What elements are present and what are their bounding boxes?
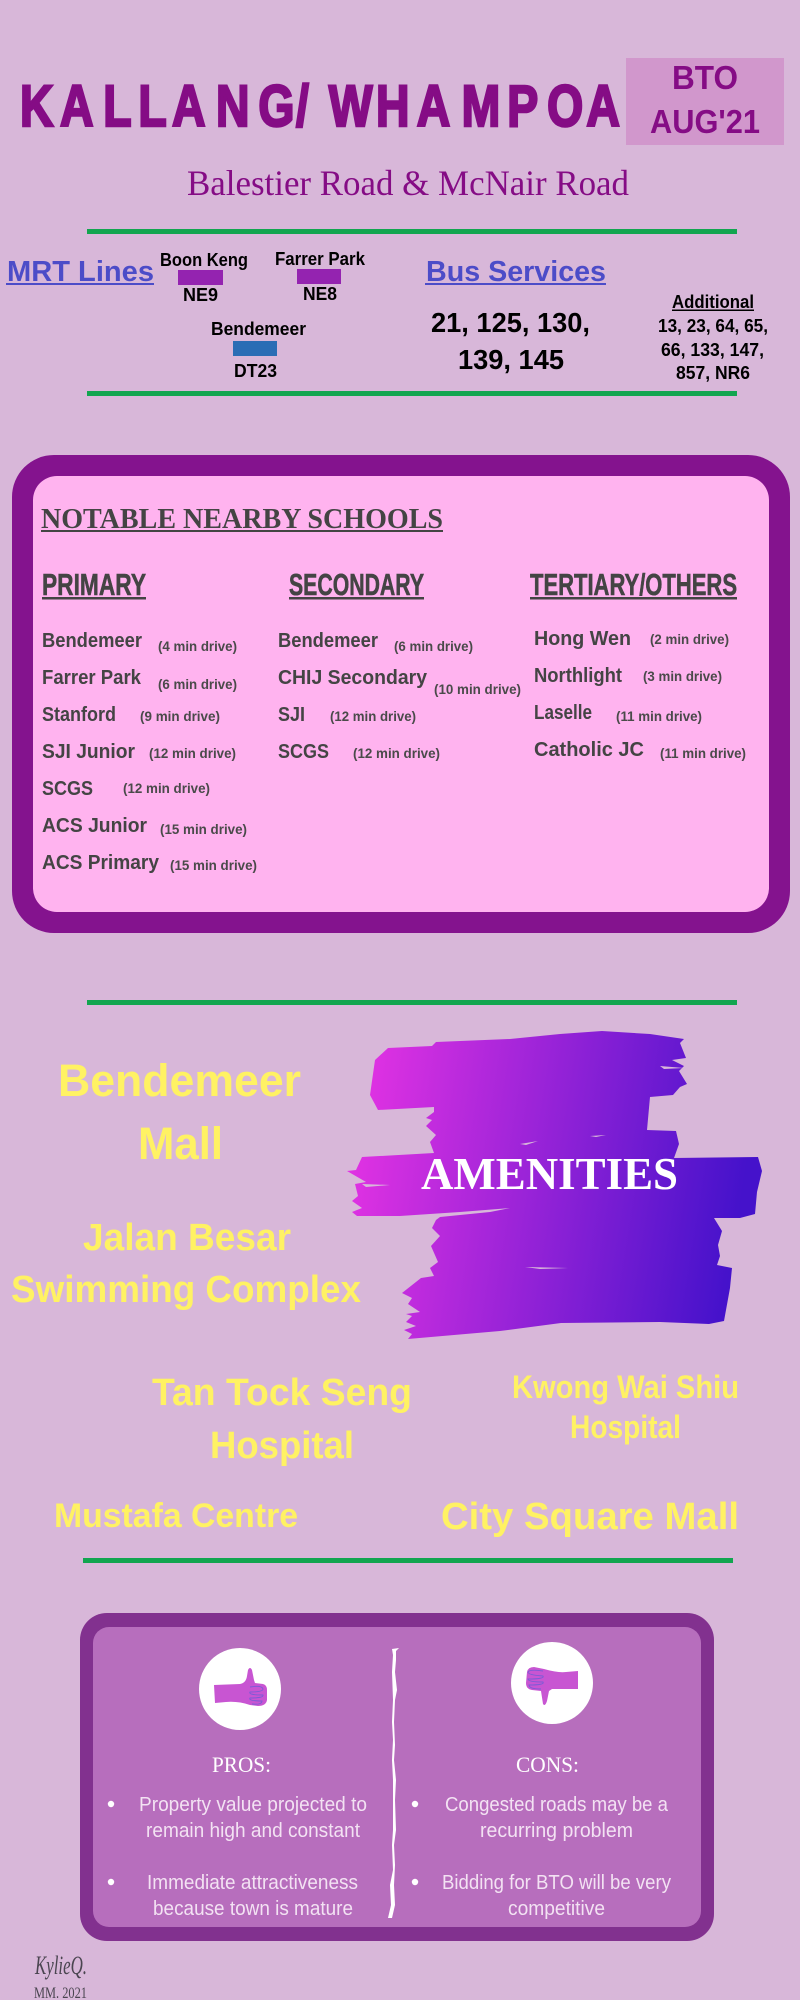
badge: BTO Aug'21: [626, 58, 784, 145]
station: Bendemeer DT23: [211, 319, 306, 381]
heading: MRT Lines: MRT Lines: [7, 256, 154, 288]
column: primary: ACS Primary: [42, 852, 160, 874]
amenity: Bendemeer Mall: Mall: [138, 1118, 223, 1169]
cons column: recurring problem: [480, 1820, 633, 1842]
column: secondary: SECONDARY: [289, 567, 424, 602]
title: KALLANG/WHAMPOA: [20, 74, 620, 139]
column: tertiary and others: (2 min drive): [650, 631, 729, 647]
brush stroke with amenities heading: AMENITIES: [421, 1148, 678, 1199]
pros column: PROS:: [212, 1752, 271, 1777]
amenity: City Square Mall: City Square Mall: [441, 1496, 739, 1538]
amenity: Jalan Besar Swimming Complex: [11, 1217, 361, 1311]
column: tertiary and others: Hong Wen: [534, 628, 631, 650]
column: primary: (15 min drive): [170, 857, 257, 873]
amenity: Mustafa Centre: Mustafa Centre: [54, 1497, 298, 1535]
icon: thumbs down: [511, 1642, 593, 1724]
column: tertiary and others: Laselle: [534, 702, 592, 724]
station: Boon Keng NE9: NE9: [183, 285, 218, 305]
column: primary: (4 min drive): [158, 638, 237, 654]
column: secondary: CHIJ Secondary: [278, 667, 428, 689]
cons column: Congested roads may be a: [445, 1794, 669, 1816]
main bus numbers: [431, 307, 590, 375]
heading: Bus Services: Bus Services: [426, 256, 606, 288]
heading: notable nearby schools: NOTABLE NEARBY SCHOOLS: [41, 503, 443, 535]
additional bus numbers: 66, 133, 147,: [661, 340, 764, 360]
badge: BTO Aug'21: BTO: [672, 59, 738, 96]
column: primary: ACS Junior: [42, 815, 147, 837]
panel: pros and cons: [80, 1613, 714, 1941]
pros column: Immediate attractiveness: [147, 1872, 358, 1894]
column: primary: (12 min drive): [149, 745, 236, 761]
amenity: Tan Tock Seng Hospital: Hospital: [210, 1425, 354, 1467]
pros column: [108, 1752, 367, 1920]
pros column: because town is mature: [153, 1898, 353, 1920]
badge: BTO Aug'21: AUG'21: [650, 103, 760, 140]
pros column: remain high and constant: [146, 1820, 360, 1842]
amenity: Tan Tock Seng Hospital: [152, 1372, 412, 1467]
amenity: Jalan Besar Swimming Complex: Jalan Besar: [83, 1217, 291, 1259]
station: Farrer Park NE8: Farrer Park: [275, 249, 366, 269]
station: Boon Keng NE9: Boon Keng: [160, 250, 248, 270]
additional bus numbers: 857, NR6: [676, 363, 750, 383]
station: Farrer Park NE8: NE8: [303, 284, 337, 304]
amenity: Kwong Wai Shiu Hospital: [512, 1369, 739, 1445]
amenity: Tan Tock Seng Hospital: Tan Tock Seng: [152, 1372, 412, 1414]
panel: MRT lines: [6, 249, 366, 381]
brush stroke with amenities heading: [347, 1031, 762, 1339]
column: tertiary and others: Northlight: [534, 665, 622, 687]
amenity: Kwong Wai Shiu Hospital: Hospital: [570, 1409, 681, 1445]
column: tertiary and others: [530, 567, 746, 761]
column: primary: Bendemeer: [42, 630, 142, 652]
amenity: Jalan Besar Swimming Complex: Swimming Complex: [11, 1269, 361, 1311]
pros column: Property value projected to: [139, 1794, 367, 1816]
column: primary: SCGS: [42, 778, 93, 800]
column: secondary: Bendemeer: [278, 630, 378, 652]
subtitle: Balestier Road & McNair Road: [187, 163, 629, 203]
column: tertiary and others: Catholic JC: [534, 739, 644, 761]
amenity: Kwong Wai Shiu Hospital: Kwong Wai Shiu: [512, 1369, 739, 1405]
column: primary: PRIMARY: [42, 567, 146, 602]
panel: bus services: [425, 256, 768, 383]
column: primary: Farrer Park: [42, 667, 142, 689]
cons column: competitive: [508, 1898, 605, 1920]
column: primary: Stanford: [42, 704, 116, 726]
column: secondary: SCGS: [278, 741, 329, 763]
column: primary: [42, 567, 257, 874]
signature: [34, 1951, 87, 2000]
amenity: Bendemeer Mall: Bendemeer: [58, 1055, 301, 1106]
column: primary: (6 min drive): [158, 676, 237, 692]
station: Bendemeer DT23: Bendemeer: [211, 319, 306, 339]
amenity: Bendemeer Mall: [58, 1055, 301, 1169]
additional bus numbers: [658, 292, 768, 383]
panel: amenities: [11, 1031, 762, 1538]
icon: thumbs up: [199, 1648, 281, 1730]
additional bus numbers: Additional: [672, 292, 754, 312]
main bus numbers: 139, 145: [458, 344, 564, 375]
cons column: [412, 1752, 671, 1920]
column: primary: (15 min drive): [160, 821, 247, 837]
column: secondary: SJI: [278, 704, 305, 726]
additional bus numbers: 13, 23, 64, 65,: [658, 316, 768, 336]
main bus numbers: 21, 125, 130,: [431, 307, 590, 338]
column: secondary: (12 min drive): [353, 745, 440, 761]
cons column: Bidding for BTO will be very: [442, 1872, 671, 1894]
column: primary: (12 min drive): [123, 780, 210, 796]
column: tertiary and others: (11 min drive): [616, 708, 702, 724]
column: tertiary and others: (11 min drive): [660, 745, 746, 761]
panel: notable nearby schools: [12, 455, 790, 933]
cons column: CONS:: [516, 1752, 579, 1777]
column: secondary: [278, 567, 521, 763]
station: Boon Keng NE9: [160, 250, 248, 305]
signature: KylieQ.: [34, 1951, 87, 1980]
station: Farrer Park NE8: [275, 249, 366, 304]
divider: [388, 1648, 399, 1918]
column: primary: SJI Junior: [42, 741, 135, 763]
column: secondary: (12 min drive): [330, 708, 416, 724]
column: secondary: (6 min drive): [394, 638, 473, 654]
column: tertiary and others: (3 min drive): [643, 668, 722, 684]
column: primary: (9 min drive): [140, 708, 220, 724]
column: secondary: (10 min drive): [434, 681, 521, 697]
station: Bendemeer DT23: DT23: [234, 361, 277, 381]
